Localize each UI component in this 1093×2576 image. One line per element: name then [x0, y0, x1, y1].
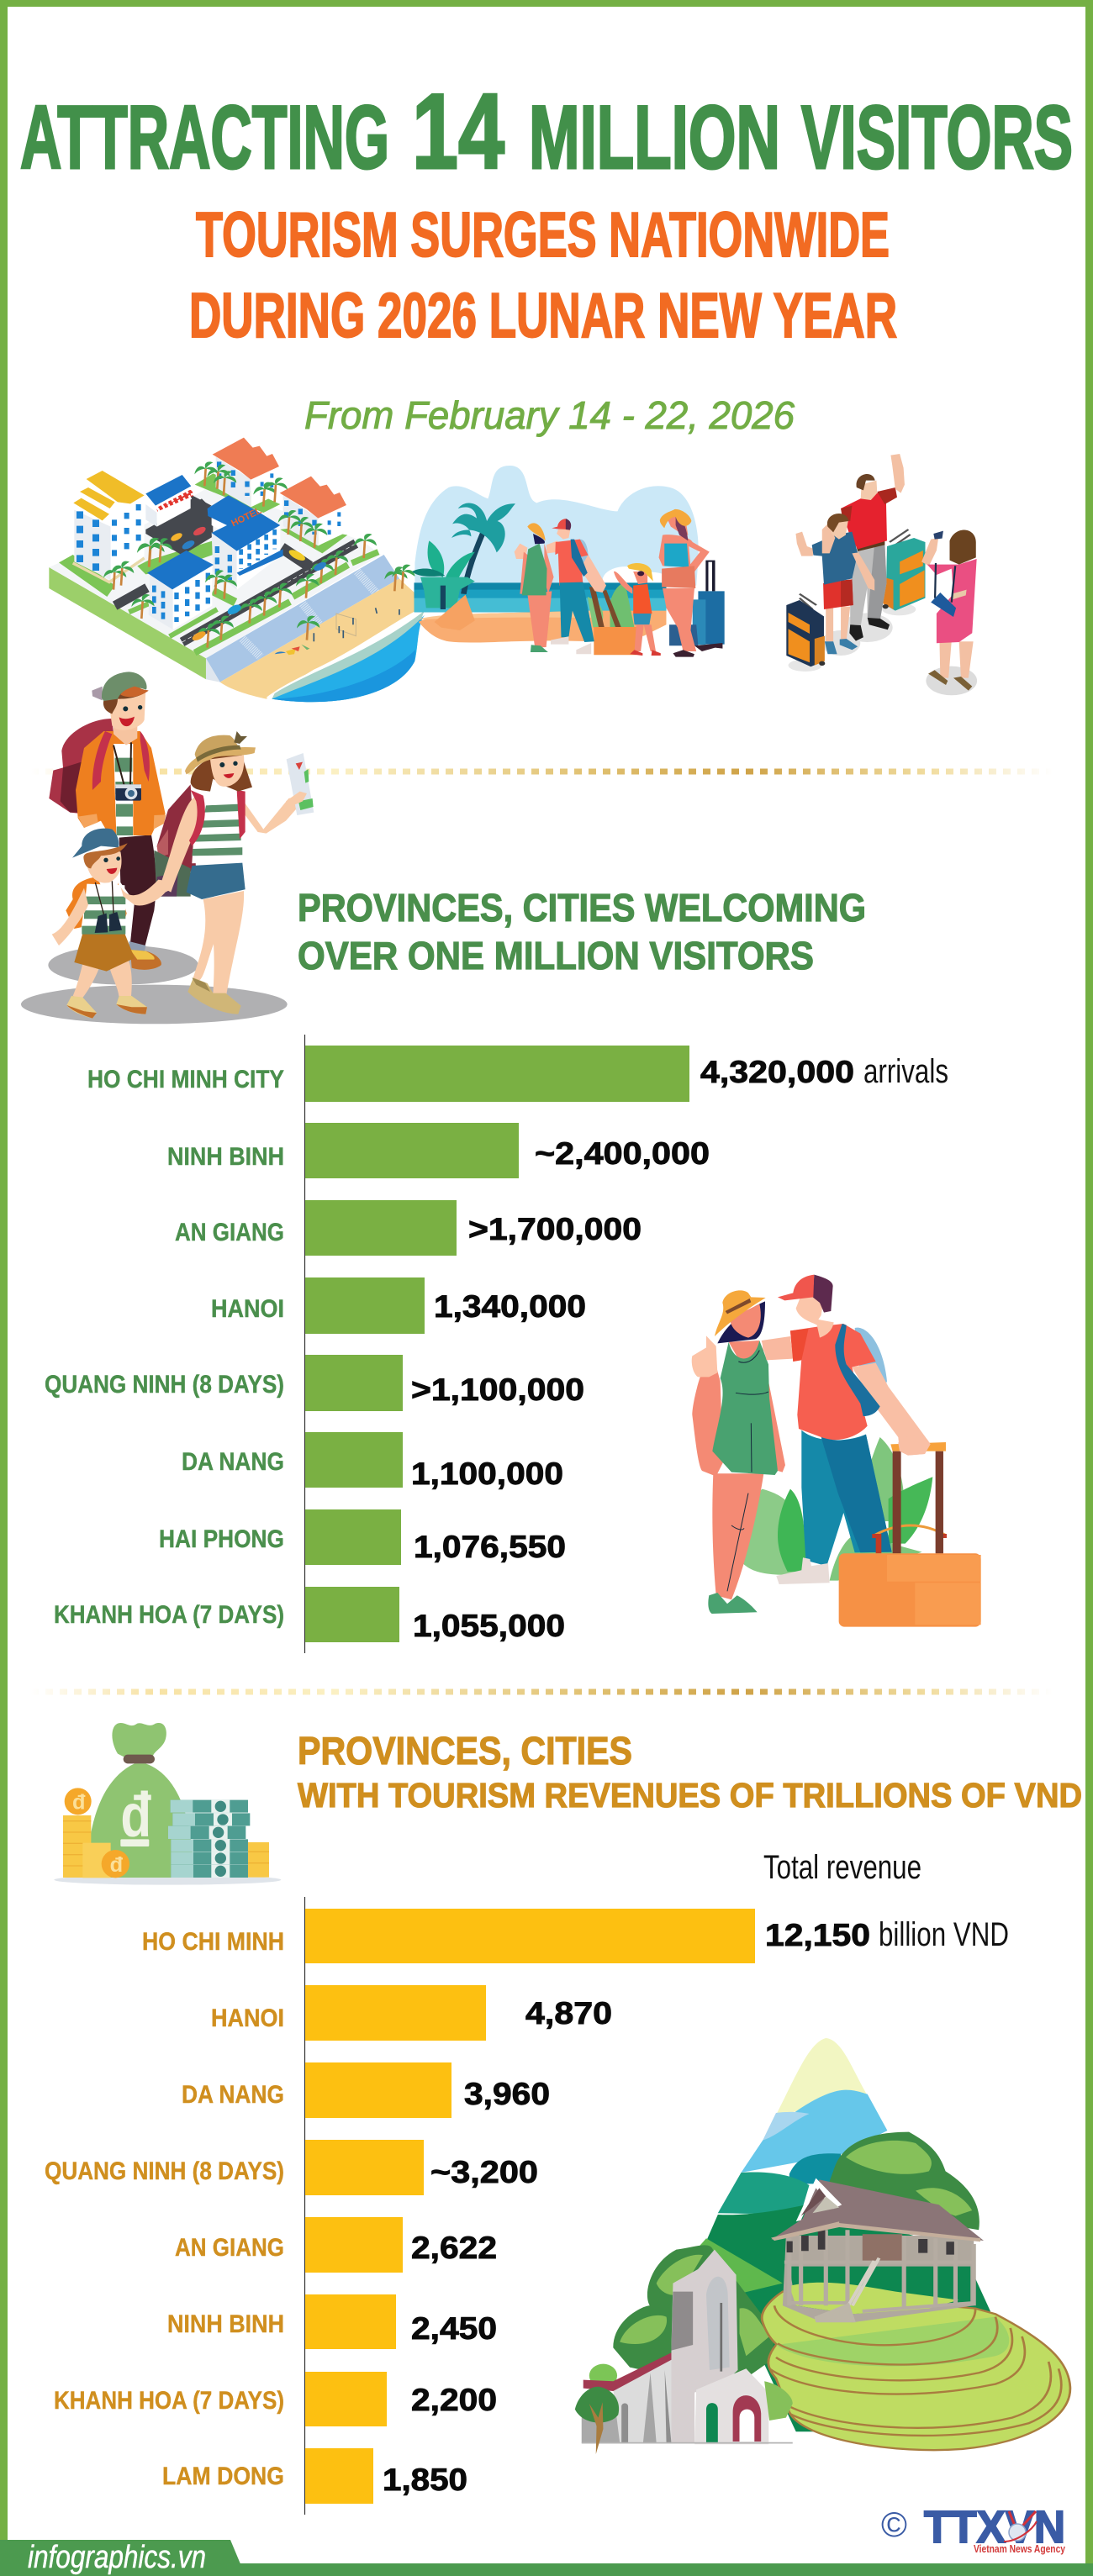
trees — [613, 2132, 979, 2389]
bar: Ho Chi Minh: 12,150 — [765, 1918, 870, 1952]
footer brand: infographics.vn — [28, 2540, 206, 2575]
subtitle — [189, 199, 897, 350]
logo: TTXVN: © — [881, 2505, 907, 2544]
bar chart: visitors — [45, 1035, 948, 1653]
total revenue label: Total revenue — [763, 1849, 921, 1886]
date line: From February 14 - 22, 2026 — [304, 393, 795, 437]
woman tourist — [154, 731, 314, 1014]
bar: Ninh Binh — [167, 1123, 710, 1178]
bar chart: revenue — [45, 1897, 1009, 2515]
beach sand — [220, 578, 426, 699]
bar: Hanoi: 4,870 — [525, 1996, 612, 2031]
icon: money bag and cash: đ — [120, 1779, 151, 1850]
bar: Quang Ninh — [45, 1355, 584, 1411]
bar: Ho Chi Minh: billion VND — [879, 1916, 1009, 1953]
boy — [795, 514, 874, 654]
heading: provinces welcoming visitors: PROVINCES, CITIES WELCOMING — [298, 886, 866, 930]
bar: Khanh Hoa: 1,055,000 — [413, 1609, 565, 1643]
bar: Ninh Binh: ~2,400,000 — [535, 1136, 710, 1171]
bar: Lam Dong — [162, 2448, 467, 2504]
bar: Da Nang: DA NANG — [182, 1448, 284, 1476]
front blue building — [147, 550, 214, 630]
bar: Khanh Hoa: 2,200 — [411, 2383, 497, 2417]
bar: Da Nang: 1,100,000 — [411, 1457, 563, 1491]
icon: money bag and cash — [54, 1723, 281, 1885]
logo: TTXVN: TTXVN — [924, 2502, 1065, 2552]
bar: Lam Dong: LAM DONG — [162, 2463, 284, 2490]
divider 2 — [31, 1689, 1053, 1694]
bar: Hanoi — [211, 1277, 586, 1334]
palms and cars — [103, 461, 415, 648]
child — [614, 563, 661, 656]
title: MILLION — [529, 87, 780, 187]
bar: Ho Chi Minh City: 4,320,000 — [700, 1055, 854, 1089]
woman photographing — [921, 530, 977, 691]
bar: Khanh Hoa: KHANH HOA (7 DAYS) — [54, 2387, 284, 2415]
suitcase — [839, 1435, 981, 1627]
orange houses — [213, 438, 279, 507]
bar: Khanh Hoa — [54, 1587, 565, 1643]
illustration: mountain, stilt house and church — [575, 2038, 1070, 2454]
bar: Ninh Binh: NINH BINH — [167, 1143, 284, 1171]
bar: Da Nang — [182, 2062, 550, 2118]
title: 14 — [412, 71, 504, 191]
woman in green — [515, 523, 554, 652]
bar: Hai Phong — [159, 1509, 566, 1565]
leaves and suitcase — [588, 582, 636, 655]
icon: money bag and cash: đ — [72, 1791, 86, 1815]
bar: Hai Phong: HAI PHONG — [159, 1525, 284, 1553]
bar: An Giang — [175, 1200, 642, 1256]
shop — [145, 475, 193, 527]
bar: Ho Chi Minh City: arrivals — [863, 1053, 948, 1090]
bar: Hanoi — [211, 1985, 612, 2041]
bar: An Giang: AN GIANG — [175, 1219, 284, 1246]
man — [841, 454, 905, 641]
teal suitcase — [883, 529, 925, 611]
building: yellow tower — [73, 471, 145, 582]
illustration: waving family with luggage — [786, 454, 977, 695]
sea — [267, 607, 426, 702]
heading: tourism revenues: PROVINCES, CITIES — [298, 1729, 632, 1773]
church — [575, 2250, 793, 2454]
illustration: tourist family — [21, 672, 314, 1024]
bar: Hai Phong: 1,076,550 — [414, 1530, 566, 1564]
footer band — [0, 2540, 1093, 2576]
navy suitcase — [786, 594, 825, 666]
bar: Da Nang: DA NANG — [182, 2081, 284, 2109]
illustration: isometric beach city — [49, 438, 426, 702]
bar: An Giang: 2,622 — [411, 2231, 497, 2265]
bar: Ho Chi Minh: HO CHI MINH — [142, 1928, 284, 1956]
heading: provinces welcoming visitors: OVER ONE MILLION VISITORS — [298, 934, 814, 977]
bar: Ninh Binh: NINH BINH — [167, 2310, 284, 2338]
bar: Hanoi: HANOI — [211, 2004, 284, 2032]
bar: Quang Ninh: ~3,200 — [430, 2155, 538, 2189]
bar: Hanoi: HANOI — [211, 1295, 284, 1323]
bar: Ho Chi Minh — [142, 1909, 1009, 1963]
heading: tourism revenues — [298, 1729, 1082, 1815]
hotel: HOTEL — [230, 506, 263, 529]
logo: TTXVN: Vietnam News Agency — [974, 2542, 1066, 2555]
bar: Quang Ninh: QUANG NINH (8 DAYS) — [45, 2157, 284, 2185]
divider 1 — [31, 768, 1053, 775]
man — [692, 1275, 931, 1584]
terraced hill — [762, 2292, 1070, 2450]
illustration: couple with suitcase — [692, 1275, 981, 1627]
title — [20, 71, 1073, 191]
title: ATTRACTING — [20, 87, 389, 187]
bar: Khanh Hoa — [54, 2372, 497, 2426]
bar: Ho Chi Minh City — [87, 1046, 948, 1102]
cash stacks — [168, 1800, 250, 1878]
bar: Da Nang: 3,960 — [464, 2077, 550, 2111]
bar: Hanoi: 1,340,000 — [434, 1289, 586, 1324]
icon: money bag and cash: đ — [110, 1853, 124, 1877]
bar: Quang Ninh: QUANG NINH (8 DAYS) — [45, 1371, 284, 1399]
palm tree — [412, 503, 515, 630]
woman — [692, 1290, 785, 1614]
heading: provinces welcoming visitors — [298, 886, 866, 977]
bar: An Giang: >1,700,000 — [468, 1212, 642, 1246]
illustration: beach family — [412, 466, 725, 657]
child tourist — [52, 829, 171, 1019]
man tourist — [49, 672, 166, 970]
bar: Ninh Binh: 2,450 — [411, 2311, 497, 2346]
sea wall — [206, 555, 399, 682]
bar: Ho Chi Minh City: HO CHI MINH CITY — [87, 1066, 284, 1093]
stilt house — [771, 2178, 984, 2322]
mother — [659, 509, 725, 657]
hotel — [208, 495, 283, 590]
man with backpack — [546, 519, 606, 654]
bar: Ninh Binh — [167, 2294, 497, 2349]
bar: Lam Dong: 1,850 — [383, 2463, 467, 2497]
bar: Da Nang — [182, 1432, 563, 1491]
bar: Khanh Hoa: KHANH HOA (7 DAYS) — [54, 1601, 284, 1629]
bar: Quang Ninh: >1,100,000 — [411, 1372, 584, 1407]
bar: An Giang: AN GIANG — [175, 2234, 284, 2262]
bar: An Giang — [175, 2217, 497, 2273]
bar: Quang Ninh — [45, 2140, 538, 2195]
